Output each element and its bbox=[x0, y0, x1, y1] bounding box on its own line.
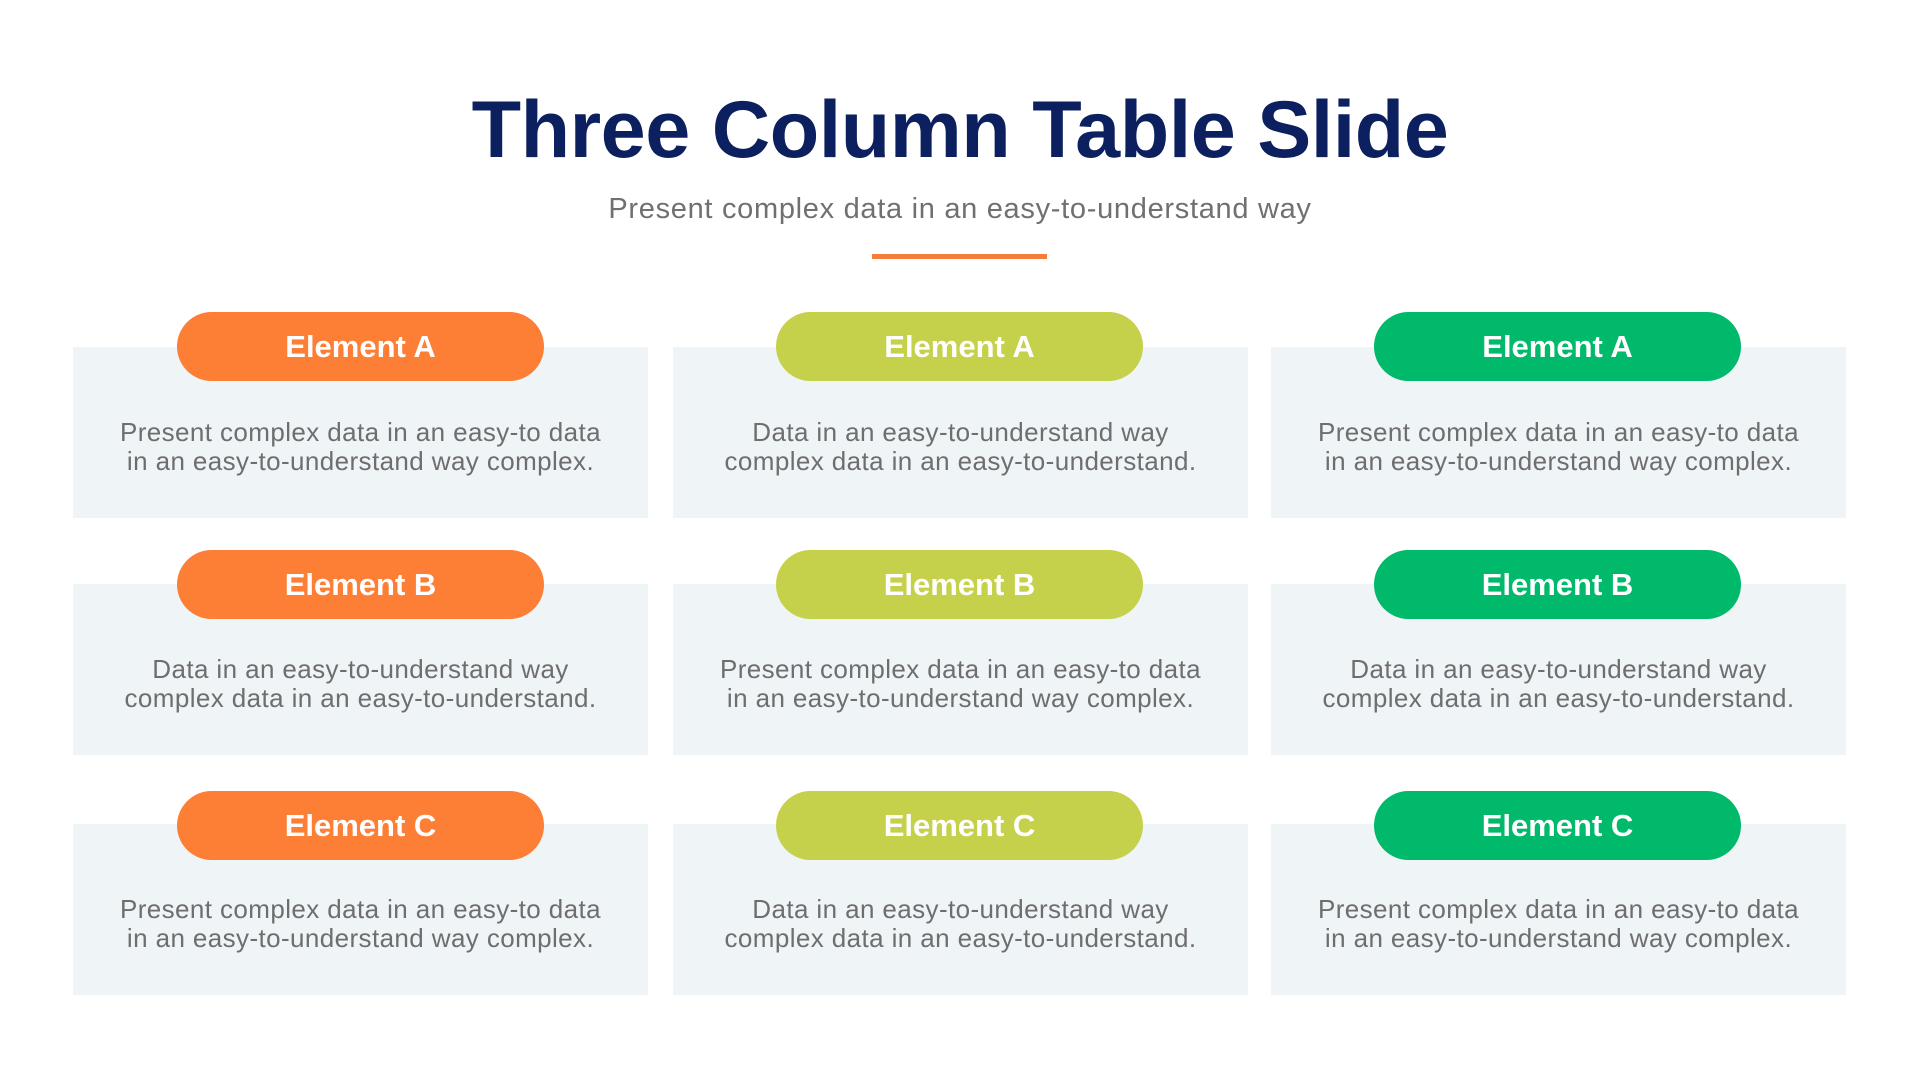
panel: col2 row A bbox=[673, 347, 1248, 518]
panel: col3 row B: complex data in an easy-to-understand. bbox=[1323, 683, 1794, 713]
panel: col1 row B: Data in an easy-to-understand way bbox=[152, 654, 569, 684]
pill: col2 Element B: Element B bbox=[884, 567, 1035, 602]
panel: col3 row B: Data in an easy-to-understand way bbox=[1350, 654, 1767, 684]
pill: col2 Element C bbox=[776, 791, 1143, 860]
panel: col2 row C: complex data in an easy-to-understand. bbox=[725, 923, 1196, 953]
pill: col3 Element B: Element B bbox=[1482, 567, 1633, 602]
panel: col2 row B bbox=[673, 584, 1248, 755]
panel: col3 row C bbox=[1271, 824, 1846, 995]
panel: col1 row B bbox=[73, 584, 648, 755]
subtitle: Present complex data in an easy-to-understand way bbox=[608, 193, 1312, 225]
pill: col3 Element C bbox=[1374, 791, 1741, 860]
pill: col3 Element C: Element C bbox=[1482, 808, 1633, 843]
pill: col3 Element A: Element A bbox=[1482, 329, 1633, 364]
panel: col2 row C: Data in an easy-to-understand way bbox=[752, 894, 1169, 924]
panel: col1 row A: Present complex data in an easy-to data bbox=[120, 417, 601, 447]
pill: col3 Element B bbox=[1374, 550, 1741, 619]
pill: col1 Element A bbox=[177, 312, 544, 381]
panel: col3 row C: Present complex data in an easy-to data bbox=[1318, 894, 1799, 924]
pill: col2 Element C: Element C bbox=[884, 808, 1035, 843]
panel: col1 row C: in an easy-to-understand way complex. bbox=[127, 923, 594, 953]
pill: col2 Element A: Element A bbox=[884, 329, 1035, 364]
panel: col2 row A: complex data in an easy-to-understand. bbox=[725, 446, 1196, 476]
title: Three Column Table Slide bbox=[472, 85, 1448, 175]
panel: col1 row C bbox=[73, 824, 648, 995]
panel: col3 row A: Present complex data in an easy-to data bbox=[1318, 417, 1799, 447]
accent underline bbox=[872, 254, 1047, 259]
panel: col3 row C: in an easy-to-understand way complex. bbox=[1325, 923, 1792, 953]
panel: col3 row A bbox=[1271, 347, 1846, 518]
panel: col3 row B bbox=[1271, 584, 1846, 755]
panel: col1 row C: Present complex data in an easy-to data bbox=[120, 894, 601, 924]
panel: col2 row B: Present complex data in an easy-to data bbox=[720, 654, 1201, 684]
pill: col1 Element B: Element B bbox=[285, 567, 436, 602]
panel: col2 row C bbox=[673, 824, 1248, 995]
pill: col2 Element A bbox=[776, 312, 1143, 381]
pill: col1 Element C: Element C bbox=[285, 808, 436, 843]
panel: col1 row A: in an easy-to-understand way complex. bbox=[127, 446, 594, 476]
pill: col2 Element B bbox=[776, 550, 1143, 619]
panel: col2 row A: Data in an easy-to-understand way bbox=[752, 417, 1169, 447]
panel: col3 row A: in an easy-to-understand way complex. bbox=[1325, 446, 1792, 476]
panel: col2 row B: in an easy-to-understand way complex. bbox=[727, 683, 1194, 713]
panel: col1 row B: complex data in an easy-to-understand. bbox=[125, 683, 596, 713]
pill: col1 Element A: Element A bbox=[285, 329, 436, 364]
panel: col1 row A bbox=[73, 347, 648, 518]
pill: col1 Element B bbox=[177, 550, 544, 619]
pill: col1 Element C bbox=[177, 791, 544, 860]
pill: col3 Element A bbox=[1374, 312, 1741, 381]
